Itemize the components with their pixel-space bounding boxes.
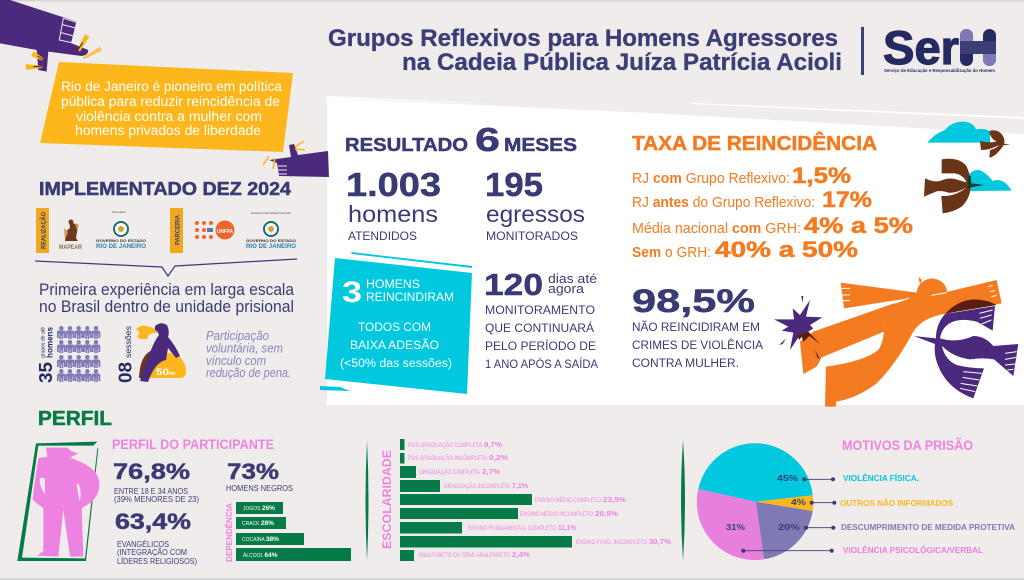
tag: realização: REALIZAÇÃO <box>38 212 48 249</box>
heading: implementado: IMPLEMENTADO DEZ 2024 <box>39 178 292 199</box>
stat: 08 sessões: sessões <box>124 326 133 358</box>
bar chart: escolaridade: PÓS-GRADUAÇÃO COMPLETA <box>408 442 482 449</box>
bar chart: escolaridade: ENSINO MÉDIO COMPLETO <box>535 497 601 504</box>
pie legend <box>840 474 1015 555</box>
stat: 63,4%: EVANGÉLICOS <box>117 539 169 549</box>
logo: unfpa <box>195 220 234 240</box>
bar chart: dependência: COCAÍNA 38% <box>242 536 279 543</box>
logo: governo RJ realização: RIO DE JANEIRO <box>96 243 146 250</box>
heading: taxa de reincidência: TAXA DE REINCIDÊNCIA <box>632 131 877 155</box>
title <box>328 25 842 76</box>
icon: grid of men <box>57 326 100 382</box>
bar chart: escolaridade: 11,1% <box>558 523 576 532</box>
stat: 98,5% <box>632 283 763 370</box>
pie chart: 4% <box>791 497 807 507</box>
text: participação voluntária: Participação <box>206 329 269 343</box>
logo: governo RJ parceria: GOVERNO DO ESTADO <box>246 239 296 243</box>
stat: 73%: HOMENS NEGROS <box>226 483 293 493</box>
bar chart: escolaridade: GRADUAÇÃO COMPLETA <box>419 469 480 476</box>
text: primeira experiência: Primeira experiência em larga escala <box>39 281 295 299</box>
list: taxas: 17% <box>822 187 872 212</box>
list: taxas: RJ com Grupo Reflexivo: <box>632 171 790 187</box>
heading: resultado 6 meses: RESULTADO <box>345 135 468 155</box>
tag: parceria <box>170 208 183 253</box>
stat: 120 dias: 1 ANO APÓS A SAÍDA <box>485 358 598 371</box>
tag: parceria: PARCERIA <box>174 215 182 245</box>
stat: 35 grupos: 35 <box>36 362 56 383</box>
stat: 98,5%: CONTRA MULHER. <box>632 358 739 370</box>
logo: governo RJ parceria <box>246 211 296 250</box>
stat: 120 dias: agora <box>548 281 585 296</box>
pie chart <box>697 443 813 560</box>
text: primeira experiência: no Brasil dentro de unidade prisional <box>39 298 294 316</box>
list: taxas: Média nacional com GRH: <box>632 221 801 237</box>
logo: governo RJ realização: GOVERNO DO ESTADO <box>96 239 146 243</box>
panel: resultados e taxa <box>327 98 1024 405</box>
stat: 120 dias: PELO PERÍODO DE <box>485 340 596 353</box>
heading: resultado 6 meses: MESES <box>504 135 577 155</box>
callout: pioneiro: violência contra a mulher com <box>76 109 262 124</box>
heading: perfil do participante: PERFIL DO PARTICIPANTE <box>112 437 274 452</box>
heading: motivos da prisão: MOTIVOS DA PRISÃO <box>842 438 973 453</box>
logo: governo RJ parceria: Secretaria de Administração Penitenciária <box>251 211 291 215</box>
bar chart: dependência: ÁLCOOL 64% <box>243 552 278 559</box>
bar chart: escolaridade: ESCOLARIDADE <box>380 450 394 549</box>
panel: 3 homens reincindiram: HOMENS <box>366 279 420 291</box>
stat: 195 egressos: egressos <box>486 201 585 227</box>
list: taxas: Sem o GRH: <box>632 245 711 261</box>
stat: 73% <box>226 459 293 493</box>
stat: 120 dias: 120 <box>484 267 543 302</box>
icon: orange figure <box>800 277 1002 407</box>
panel: 3 homens reincindiram: (<50% das sessões) <box>340 358 452 370</box>
stat: 76,8%: ENTRE 18 E 34 ANOS <box>114 486 188 496</box>
stat: 98,5%: CRIMES DE VIOLÊNCIA <box>632 339 763 352</box>
stat: 63,4% <box>115 509 197 566</box>
list: taxas: 40% a 50% <box>715 237 858 262</box>
icon: lower pointing hand <box>263 141 329 177</box>
icon: seated man 50 min: min <box>169 371 176 377</box>
stat: 35 grupos: grupos de até <box>40 327 46 358</box>
stat: 76,8%: 76,8% <box>113 459 190 484</box>
stat: 98,5%: NÃO REINCIDIRAM EM <box>632 321 760 334</box>
stat: 63,4%: 63,4% <box>115 509 191 534</box>
heading: resultado 6 meses <box>345 121 577 158</box>
pie legend: DESCUMPRIMENTO DE MEDIDA PROTETIVA <box>841 523 1015 532</box>
stat: 1.003 homens: 1.003 <box>346 166 441 203</box>
icon: lower cloud <box>968 170 1012 191</box>
icon: purple star <box>774 296 822 359</box>
heading: resultado 6 meses: 6 <box>475 121 500 158</box>
bar chart: escolaridade: PÓS-GRADUAÇÃO INCOMPLETA <box>408 455 487 462</box>
callout: pioneiro: homens privados de liberdade <box>75 123 261 138</box>
bar chart: escolaridade: 7,1% <box>512 481 528 490</box>
icon: seated man 50 min <box>136 323 186 382</box>
logo: mapear <box>59 220 83 251</box>
bar chart: escolaridade: GRADUAÇÃO INCOMPLETA <box>444 483 510 490</box>
icon: top-left pointing hand <box>0 0 102 72</box>
stat: 73%: 73% <box>227 459 279 484</box>
stat: 08 sessões: 08 <box>116 362 136 383</box>
callout: pioneiro: Rio de Janeiro é pioneiro em política <box>61 79 282 94</box>
stat: 195 egressos <box>485 166 585 243</box>
panel: 3 homens reincindiram: BAIXA ADESÃO <box>350 339 439 352</box>
pie chart: 20% <box>778 522 801 532</box>
logo: governo RJ realização <box>96 210 146 250</box>
stat: 76,8% <box>113 459 199 504</box>
list: taxas: RJ antes do Grupo Reflexivo: <box>632 195 815 211</box>
bar chart: escolaridade: 2,4% <box>512 550 530 559</box>
bar chart: escolaridade: 2,7% <box>482 467 500 476</box>
logo: SerH: Ser <box>883 21 959 74</box>
stat: 63,4%: LÍDERES RELIGIOSOS) <box>117 556 197 566</box>
stat: 63,4%: (INTEGRAÇÃO COM <box>117 547 187 557</box>
panel: 3 homens reincindiram: 3 <box>342 276 362 309</box>
logo: SerH <box>883 21 996 74</box>
title: na Cadeia Pública Juíza Patrícia Acioli <box>402 49 842 76</box>
panel: 3 homens reincindiram: REINCINDIRAM <box>366 292 454 304</box>
callout pointer line <box>35 259 297 276</box>
bar chart: escolaridade: ENSINO FUNDAMENTAL COMPLETO <box>468 526 556 532</box>
leaf divider 1 <box>366 440 368 561</box>
stat: 120 dias: QUE CONTINUARÁ <box>485 322 594 335</box>
bar chart: dependência: DEPENDÊNCIA <box>225 503 234 562</box>
icon: seated man 50 min: 50 <box>156 367 169 377</box>
bar chart: escolaridade: ANALFABETO OU SEMI-ANALFABETO <box>418 553 510 559</box>
text: participação voluntária: redução de pena. <box>206 366 291 380</box>
tag: realização <box>36 208 49 253</box>
list: taxas: 1,5% <box>792 163 851 188</box>
heading: perfil: PERFIL <box>38 408 112 430</box>
stat: 98,5%: 98,5% <box>632 283 755 319</box>
callout: pioneiro <box>40 62 293 152</box>
stat: 35 grupos: homens <box>44 327 54 358</box>
bar chart: escolaridade <box>380 439 671 561</box>
bar chart: escolaridade: ENSINO MÉDIO INCOMPLETO <box>520 511 593 518</box>
stat: 1.003 homens: homens <box>348 201 438 227</box>
list: taxas <box>632 163 913 262</box>
bar chart: escolaridade: 30,7% <box>649 537 671 546</box>
bar chart: escolaridade: 0,2% <box>489 453 508 462</box>
bar chart: escolaridade: ENSINO FUND. INCOMPLETO <box>576 540 647 546</box>
stat: 120 dias: dias até <box>548 271 597 286</box>
bar chart: dependência <box>225 502 351 562</box>
pie legend: OUTROS NÃO INFORMADOS <box>840 499 954 508</box>
logo: mapear: MAPEAR <box>59 245 83 251</box>
stat: 120 dias: MONITORAMENTO <box>485 305 595 317</box>
text: primeira experiência <box>39 281 295 316</box>
list: taxas: 4% a 5% <box>804 213 913 238</box>
leaf divider 2 <box>681 440 685 561</box>
icon: purple bird <box>914 299 1018 398</box>
logo: SerH: Serviço de Educação e Responsabilização do Homem <box>884 68 995 73</box>
logo: unfpa: UNFPA <box>217 229 233 235</box>
stat: 195 egressos: MONITORADOS <box>486 231 578 243</box>
panel: 3 homens reincindiram <box>320 252 472 394</box>
stat: 08 sessões <box>116 326 136 383</box>
pie legend: VIOLÊNCIA PSICOLÓGICA/VERBAL <box>843 546 983 555</box>
stat: 195 egressos: 195 <box>485 166 543 203</box>
text: participação voluntária: vínculo com <box>206 354 266 368</box>
title divider <box>861 27 864 75</box>
stat: 1.003 homens <box>346 166 441 243</box>
bar chart: dependência: CRACK 28% <box>242 520 274 527</box>
bar chart: escolaridade: 0,7% <box>484 440 502 449</box>
white brush streak <box>326 96 500 104</box>
white brush streak upper <box>690 103 1024 119</box>
icon: small brown bird <box>980 130 1010 158</box>
icon: large brown bird <box>924 159 983 213</box>
title: Grupos Reflexivos para Homens Agressores <box>328 25 838 52</box>
bar chart: escolaridade: 23,5% <box>603 495 626 504</box>
stat: 76,8%: (39% MENORES DE 23) <box>114 494 199 504</box>
text: participação voluntária <box>206 329 291 380</box>
panel: 3 homens reincindiram: TODOS COM <box>358 322 431 334</box>
bar chart: dependência: JOGOS 26% <box>243 505 275 512</box>
bar chart: escolaridade: 20,9% <box>595 509 618 518</box>
stat: 1.003 homens: ATENDIDOS <box>348 231 417 243</box>
leader lines <box>742 478 836 552</box>
text: participação voluntária: voluntária, sem <box>206 342 283 356</box>
pie chart: 31% <box>726 522 745 532</box>
stat: 35 grupos <box>36 327 56 383</box>
icon: man in frame <box>17 442 99 561</box>
pie chart: 45% <box>777 473 799 483</box>
stat: 120 dias <box>484 267 598 371</box>
logo: governo RJ realização: Secretaria <box>112 210 126 214</box>
logo: governo RJ parceria: RIO DE JANEIRO <box>246 243 296 250</box>
pie legend: VIOLÊNCIA FÍSICA. <box>843 474 919 483</box>
icon: top cloud <box>927 122 990 143</box>
callout: pioneiro: pública para reduzir reincidência de <box>61 94 280 109</box>
